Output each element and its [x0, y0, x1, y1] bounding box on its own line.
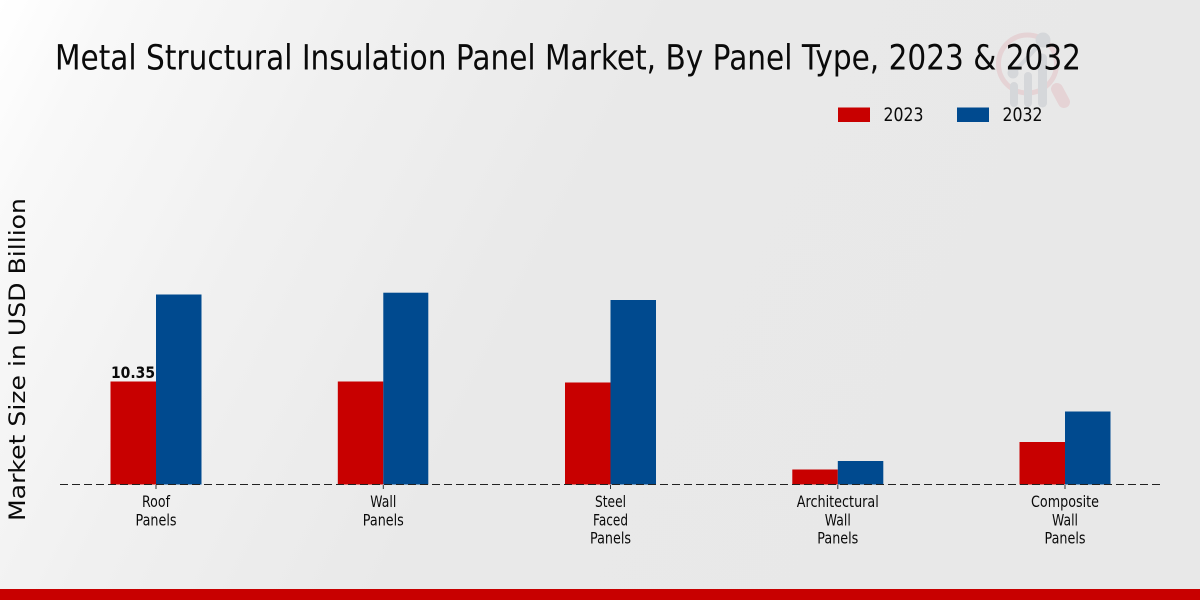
label: Steel Faced Panels: Faced [593, 510, 628, 530]
legend item: 2023 [838, 104, 924, 126]
group: Composite Wall Panels [1020, 412, 1110, 484]
group: Wall Panels [338, 293, 428, 484]
label: Architectural Wall Panels: Architectural [797, 492, 879, 511]
label: Roof Panels: Roof [142, 492, 170, 511]
label: Wall Panels [363, 485, 404, 530]
legend item: 2032: 2032 [1002, 104, 1042, 126]
label: Roof Panels: Panels [136, 510, 176, 530]
label: Composite Wall Panels [1031, 485, 1099, 548]
legend item: 2023: 2023 [884, 104, 924, 126]
label: Architectural Wall Panels: Panels [817, 528, 858, 548]
footer bar [0, 589, 1200, 600]
label: Steel Faced Panels: Steel [595, 492, 626, 511]
label: Roof Panels [136, 485, 176, 530]
label: Composite Wall Panels: Composite [1031, 492, 1099, 511]
group: Steel Faced Panels [565, 300, 656, 484]
label: Steel Faced Panels: Panels [590, 528, 631, 548]
legend [838, 104, 1042, 126]
x axis baseline [60, 484, 1160, 486]
legend item: 2032 [957, 104, 1042, 126]
label: Wall Panels: Panels [363, 510, 404, 530]
bar chart [60, 293, 1160, 484]
label: Wall Panels: Wall [370, 492, 396, 511]
icon: watermark magnifier logo [998, 32, 1064, 103]
label: Architectural Wall Panels [797, 485, 879, 548]
group: Roof Panels [110, 294, 202, 484]
group: Architectural Wall Panels [792, 461, 883, 484]
label: Composite Wall Panels: Panels [1044, 528, 1086, 548]
label: Steel Faced Panels [590, 485, 631, 548]
y axis label: Market Size in USD Billion [5, 198, 31, 521]
data label: 10.35: 10.35 [111, 363, 155, 382]
x axis labels [136, 485, 1099, 548]
label: Composite Wall Panels: Wall [1052, 510, 1078, 530]
label: Architectural Wall Panels: Wall [825, 510, 851, 530]
